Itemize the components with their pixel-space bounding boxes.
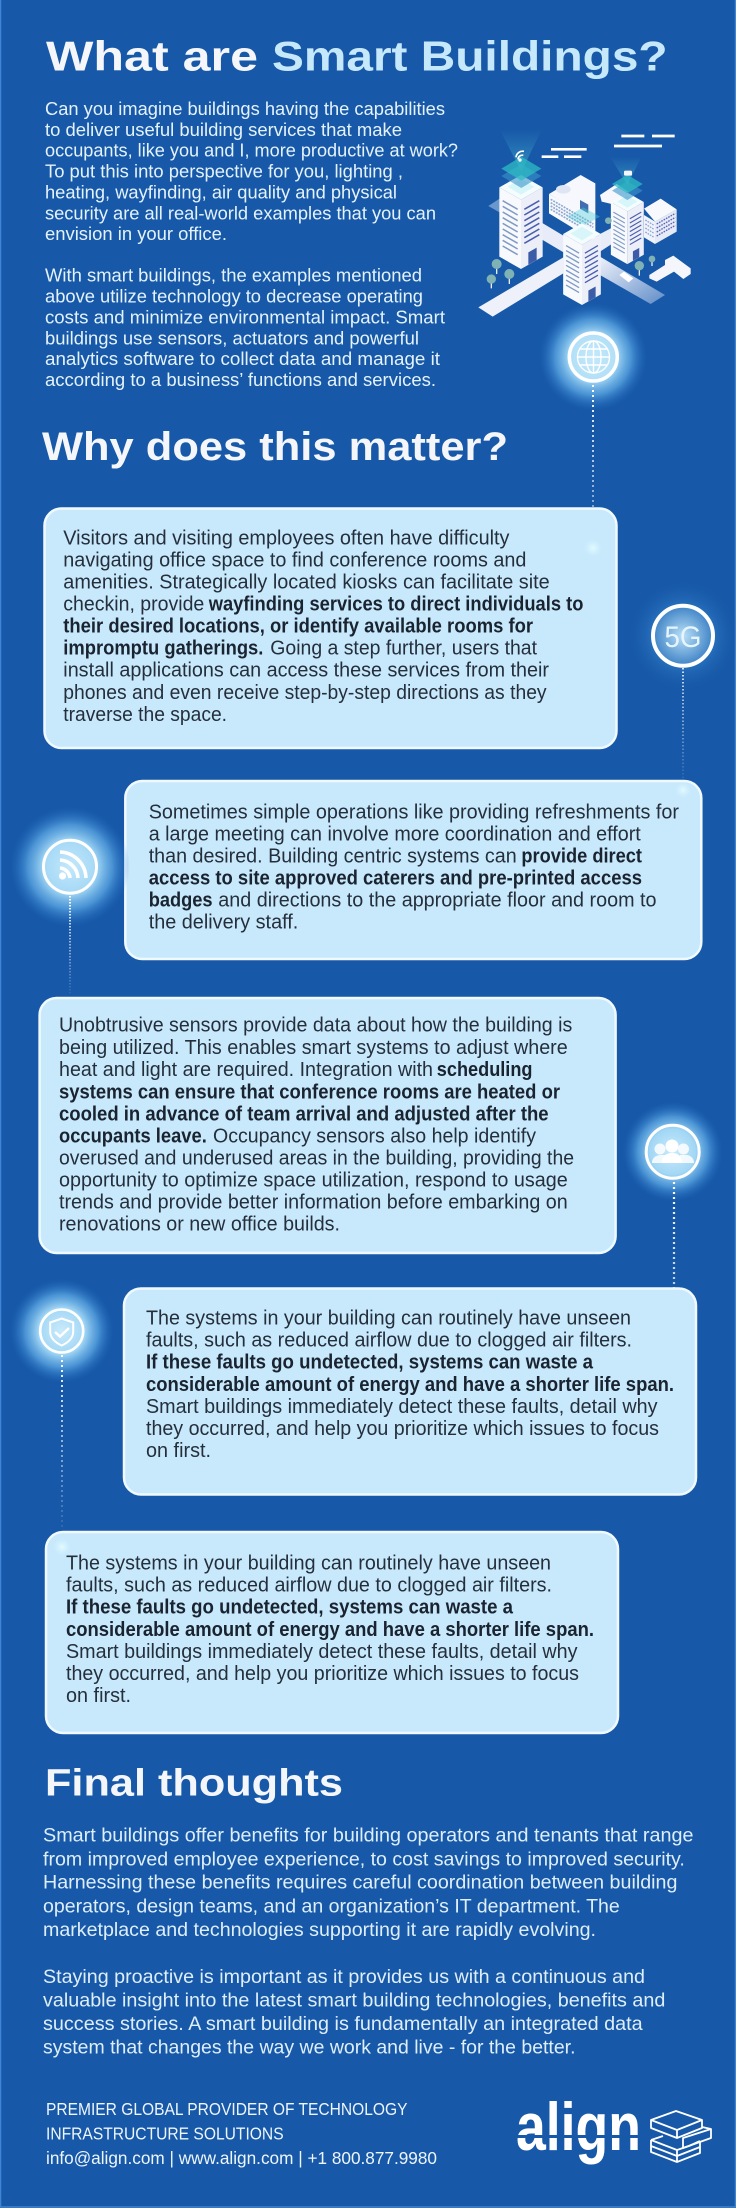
text: catering [149, 801, 679, 934]
intro text block: To put this into perspective for you, lighting , [45, 162, 403, 182]
icon: wifi signal [10, 807, 130, 927]
intro text block [45, 99, 458, 390]
footer contact text: info@align.com | www.align.com | +1 800.877.9980 [46, 2148, 437, 2168]
text: faults repeat: Smart buildings immediately detect these faults, detail why [66, 1641, 578, 1663]
text: wayfinding: their desired locations, or identify available rooms for [63, 616, 533, 638]
text block: final thoughts: success stories. A smart building is fundamentally an integrated data [43, 2013, 643, 2035]
intro text block: according to a business’ functions and services. [45, 370, 436, 390]
connector: wifi to card 3 [69, 896, 71, 995]
heading: final thoughts: Final thoughts [45, 1763, 343, 1805]
title: Smart Buildings? [272, 33, 668, 80]
connector: shield to card 5 [61, 1355, 63, 1530]
intro text block: costs and minimize environmental impact. Smart [45, 307, 445, 327]
text: catering: and directions to the appropriate floor and room to [218, 890, 657, 912]
text: faults: The systems in your building can routinely have unseen [146, 1308, 631, 1330]
text block: final thoughts [43, 1825, 694, 2059]
text: wayfinding: impromptu gatherings. [63, 638, 263, 660]
text: faults: Smart buildings immediately detect these faults, detail why [146, 1396, 658, 1418]
text: wayfinding: checkin, provide [63, 594, 204, 616]
text: wayfinding: phones and even receive step-by-step directions as they [63, 682, 547, 704]
intro text block: security are all real-world examples that you can [45, 204, 436, 224]
text block: final thoughts: Harnessing these benefits requires careful coordination between building [43, 1872, 677, 1894]
text: faults [146, 1308, 674, 1462]
panel: wayfinding card [44, 508, 616, 748]
text: wayfinding: wayfinding services to direct individuals to [208, 594, 583, 616]
text: catering: access to site approved caterers and pre-printed access [149, 868, 642, 890]
text: faults: If these faults go undetected, systems can waste a [146, 1352, 594, 1374]
text block: final thoughts: system that changes the way we work and live - for the better. [43, 2037, 576, 2059]
text block: final thoughts: marketplace and technologies supporting it are rapidly evolving. [43, 1919, 596, 1941]
text: faults repeat: they occurred, and help you prioritize which issues to focus [66, 1663, 579, 1685]
text: sensors: Occupancy sensors also help identify [213, 1125, 536, 1147]
text: faults: they occurred, and help you prioritize which issues to focus [146, 1418, 659, 1440]
text: wayfinding: Going a step further, users that [270, 638, 537, 660]
icon: globe [539, 303, 647, 411]
intro text block: buildings use sensors, actuators and powerful [45, 328, 419, 348]
icon: 5G: 5G [664, 621, 702, 654]
footer contact text: PREMIER GLOBAL PROVIDER OF TECHNOLOGY [46, 2099, 408, 2119]
intro text block: With smart buildings, the examples mentioned [45, 266, 422, 286]
connector: people to card 4 [673, 1182, 675, 1288]
text block: final thoughts: Smart buildings offer benefits for building operators and tenants that range [43, 1825, 694, 1847]
text: faults: considerable amount of energy and have a shorter life span. [146, 1374, 674, 1396]
intro text block: heating, wayfinding, air quality and physical [45, 183, 397, 203]
text block: final thoughts: valuable insight into the latest smart building technologies, benefits and [43, 1990, 665, 2012]
text: wayfinding: traverse the space. [63, 704, 227, 726]
intro text block: above utilize technology to decrease operating [45, 286, 423, 306]
footer contact text: INFRASTRUCTURE SOLUTIONS [46, 2123, 284, 2143]
text: sensors: systems can ensure that conference rooms are heated or [59, 1081, 560, 1103]
text: faults repeat: considerable amount of energy and have a shorter life span. [66, 1619, 594, 1641]
text: faults: on first. [146, 1440, 211, 1462]
text: faults repeat: If these faults go undetected, systems can waste a [66, 1597, 514, 1619]
intro text block: to deliver useful building services that make [45, 120, 402, 140]
text block: final thoughts: operators, design teams, and an organization’s IT department. The [43, 1895, 620, 1917]
connector: 5G to card 2 [682, 668, 684, 778]
text: catering: the delivery staff. [149, 912, 298, 934]
intro text block: Can you imagine buildings having the capabilities [45, 99, 445, 119]
text: sensors: occupants leave. [59, 1125, 207, 1147]
heading: why does this matter: Why does this matter? [42, 425, 508, 469]
panel: catering card [125, 781, 701, 959]
text: sensors: heat and light are required. Integration with [59, 1059, 433, 1081]
title: What are [46, 33, 258, 80]
text: sensors: opportunity to optimize space utilization, respond to usage [59, 1170, 568, 1192]
text: wayfinding: amenities. Strategically located kiosks can facilitate site [63, 571, 550, 593]
panel: faults card [124, 1288, 696, 1494]
text: wayfinding [63, 527, 583, 726]
text: sensors: being utilized. This enables smart systems to adjust where [59, 1037, 568, 1059]
text: catering: Sometimes simple operations like providing refreshments for [149, 801, 679, 823]
icon: shield [10, 1279, 114, 1383]
text: sensors: overused and underused areas in the building, providing the [59, 1147, 574, 1169]
icon: people [623, 1102, 723, 1202]
text: sensors: cooled in advance of team arrival and adjusted after the [59, 1103, 549, 1125]
text: catering: a large meeting can involve more coordination and effort [149, 823, 641, 845]
text: sensors: scheduling [437, 1059, 532, 1081]
text: faults repeat: on first. [66, 1685, 131, 1707]
text: faults repeat [66, 1552, 594, 1707]
text: wayfinding: navigating office space to find conference rooms and [63, 549, 526, 571]
text block: final thoughts: Staying proactive is important as it provides us with a continuous and [43, 1966, 645, 1988]
intro text block: occupants, like you and I, more productive at work? [45, 141, 458, 161]
panel: faults card repeat [46, 1532, 618, 1733]
text: sensors: Unobtrusive sensors provide data about how the building is [59, 1015, 572, 1037]
text block: final thoughts: from improved employee experience, to cost savings to improved security. [43, 1848, 685, 1870]
intro text block: envision in your office. [45, 224, 227, 244]
text: catering: badges [149, 890, 213, 912]
logo: align: align [516, 2089, 641, 2165]
connector: globe to card 1 [592, 385, 594, 508]
title [46, 33, 668, 80]
footer contact text [46, 2099, 437, 2168]
icon: 5G [627, 580, 736, 692]
text: faults repeat: faults, such as reduced airflow due to clogged air filters. [66, 1575, 552, 1597]
intro text block: analytics software to collect data and manage it [45, 349, 440, 369]
text: wayfinding: Visitors and visiting employees often have difficulty [63, 527, 510, 549]
text: sensors [59, 1015, 574, 1236]
text: sensors: trends and provide better information before embarking on [59, 1192, 568, 1214]
text: sensors: renovations or new office builds. [59, 1214, 340, 1236]
text: wayfinding: install applications can access these services from their [63, 660, 549, 682]
illustration: isometric smart city [478, 130, 691, 317]
panel: sensors card [40, 998, 616, 1253]
text: faults repeat: The systems in your building can routinely have unseen [66, 1552, 551, 1574]
text: catering: than desired. Building centric systems can [149, 845, 517, 867]
text: catering: provide direct [521, 845, 642, 867]
text: faults: faults, such as reduced airflow due to clogged air filters. [146, 1330, 632, 1352]
